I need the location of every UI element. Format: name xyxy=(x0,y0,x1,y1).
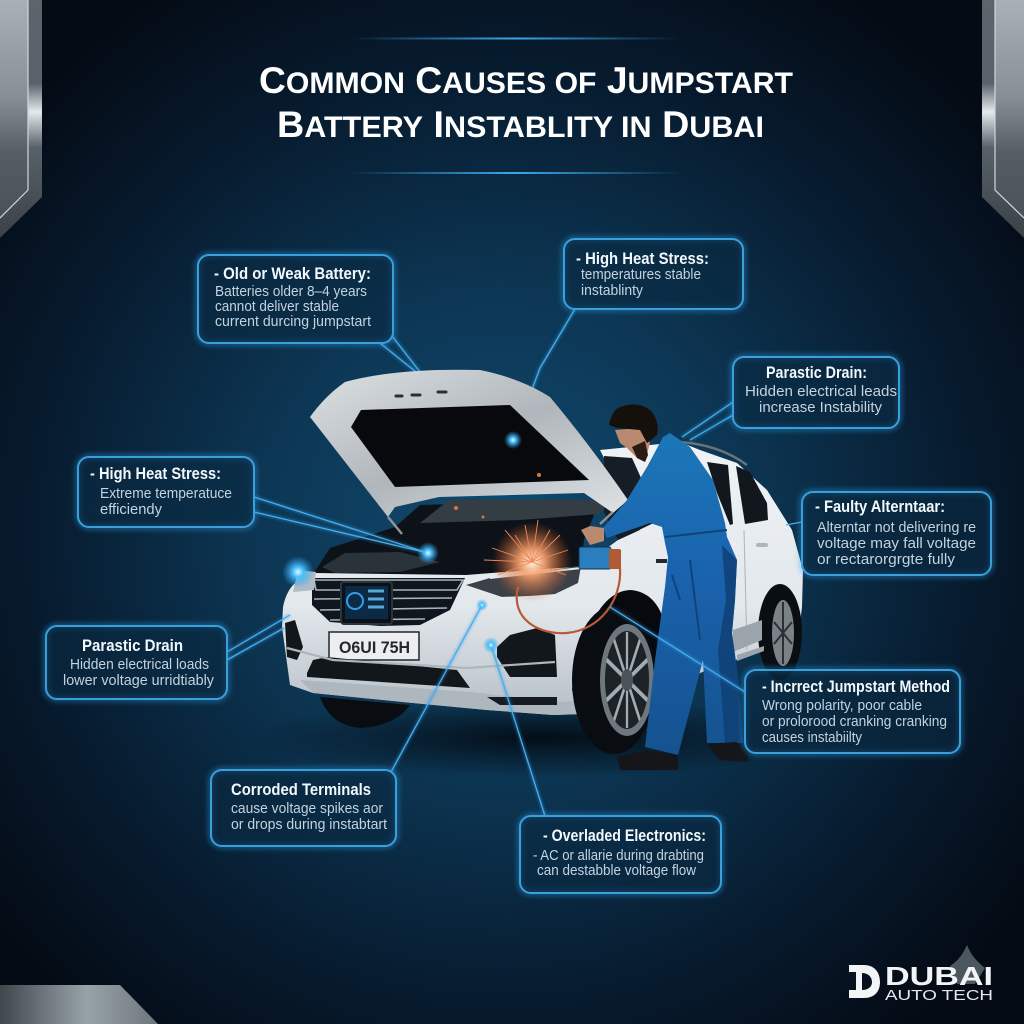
callout: high heat stress left: - High Heat Stress: xyxy=(90,465,221,483)
callout: high heat stress top: temperatures stable xyxy=(581,266,701,283)
callout: overladed electronics xyxy=(520,816,721,893)
callout: parastic drain left: Hidden electrical loads xyxy=(70,656,209,673)
car body xyxy=(282,442,803,715)
callout: parastic drain left xyxy=(46,626,227,699)
charger xyxy=(579,547,621,569)
lower lip shade xyxy=(300,680,584,715)
callout: incorrect jumpstart method: or prolorood cranking cranking xyxy=(762,713,947,730)
corner: bottom-left metal xyxy=(0,985,158,1024)
callout: parastic drain right: Parastic Drain: xyxy=(766,364,867,382)
windshield inner glass xyxy=(420,500,604,523)
callout: parastic drain right: Hidden electrical leads xyxy=(745,383,897,400)
logo: DUBAI xyxy=(885,961,993,991)
logo xyxy=(849,945,993,1004)
car xyxy=(282,370,803,754)
front tyre under bumper xyxy=(320,697,410,728)
left bumper vent xyxy=(285,620,303,660)
mirror trim xyxy=(656,559,667,563)
floor shadow xyxy=(250,698,830,778)
suit folds xyxy=(665,530,727,640)
callout: old or weak battery xyxy=(198,255,393,343)
head xyxy=(615,428,650,462)
roof rail xyxy=(680,442,747,465)
jumper cable xyxy=(517,568,620,633)
callout: overladed electronics: can destabble voltage flow xyxy=(537,862,696,879)
grille xyxy=(312,578,465,626)
suit xyxy=(603,433,743,755)
front wheel arch xyxy=(572,590,668,740)
hood strut xyxy=(388,512,613,534)
callout: high heat stress left xyxy=(78,457,254,527)
connector end dots xyxy=(282,431,522,653)
callout: high heat stress left: Extreme temperatuce xyxy=(100,485,232,502)
callout: corroded terminals xyxy=(211,770,396,846)
sparks xyxy=(454,473,572,602)
hand xyxy=(581,526,604,545)
headlight chrome xyxy=(490,568,581,598)
connector lines behind car xyxy=(380,309,575,440)
callout: old or weak battery: cannot deliver stable xyxy=(215,298,339,315)
callout: overladed electronics: - AC or allarie during drabting xyxy=(533,847,704,864)
callout: faulty alternator: - Faulty Alterntaar: xyxy=(815,498,945,516)
lower small vent xyxy=(487,697,557,705)
hip and rear leg shade xyxy=(718,545,743,743)
corner: top-right metal xyxy=(982,0,1024,238)
rocker trim xyxy=(733,620,764,661)
diagnostic device xyxy=(341,582,392,624)
callout: incorrect jumpstart method: causes instabiilty xyxy=(762,729,862,746)
callout: corroded terminals: or drops during instabtart xyxy=(231,816,388,833)
callout: faulty alternator: or rectarorgrgte fully xyxy=(817,551,956,568)
callout: high heat stress top xyxy=(564,239,743,309)
callout: parastic drain right: increase Instability xyxy=(759,399,882,416)
front wheel xyxy=(572,606,656,754)
corner: top-left metal xyxy=(0,0,42,238)
title: COMMON CAUSES OF JUMPSTART xyxy=(259,60,793,101)
left headlight xyxy=(293,570,316,592)
chrome bumper bar xyxy=(287,648,555,668)
callout: parastic drain right xyxy=(733,357,899,428)
connector lines in front of car xyxy=(227,402,802,816)
callout: old or weak battery: current durcing jumpstart xyxy=(215,313,372,330)
callout: incorrect jumpstart method: - Incrrect Jumpstart Method xyxy=(762,678,950,696)
beard xyxy=(632,441,648,462)
callout: old or weak battery: - Old or Weak Battery: xyxy=(214,265,371,283)
callout: old or weak battery: Batteries older 8–4 years xyxy=(215,283,367,300)
hair xyxy=(609,404,658,443)
hood rim holes xyxy=(396,392,446,396)
callout: incorrect jumpstart method: Wrong polarity, poor cable xyxy=(762,697,922,714)
callout: high heat stress top: - High Heat Stress: xyxy=(576,250,709,268)
title: BATTERY INSTABLITY IN DUBAI xyxy=(277,104,764,145)
right bumper vent xyxy=(497,628,557,677)
right headlight xyxy=(466,566,581,598)
callout: corroded terminals: Corroded Terminals xyxy=(231,781,371,799)
callout: faulty alternator: Alterntar not delivering re xyxy=(817,519,976,536)
license plate: O6UI 75H xyxy=(339,638,410,657)
boots xyxy=(617,742,748,770)
lower center vent xyxy=(307,657,470,688)
callout: overladed electronics: - Overladed Electronics: xyxy=(543,827,706,845)
door handle xyxy=(756,543,768,547)
side windows xyxy=(707,462,768,525)
hood liner xyxy=(351,405,589,487)
title xyxy=(259,38,793,174)
license plate xyxy=(329,632,419,660)
callout: parastic drain left: lower voltage urridtiably xyxy=(63,672,214,689)
hood xyxy=(310,370,628,517)
callout: parastic drain left: Parastic Drain xyxy=(82,637,183,655)
logo: AUTO TECH xyxy=(885,987,993,1004)
mechanic xyxy=(579,404,748,770)
callout: faulty alternator xyxy=(802,492,991,575)
door details xyxy=(744,530,747,650)
engine parts xyxy=(322,552,440,573)
windshield xyxy=(604,456,660,540)
rear wheel xyxy=(758,584,802,680)
callout: corroded terminals: cause voltage spikes aor xyxy=(231,800,383,817)
callout: high heat stress top: instablinty xyxy=(581,282,643,299)
callout: high heat stress left: efficiendy xyxy=(100,501,162,518)
engine bay xyxy=(314,500,600,575)
callout: incorrect jumpstart method xyxy=(745,670,960,753)
callout: faulty alternator: voltage may fall voltage xyxy=(817,535,976,552)
